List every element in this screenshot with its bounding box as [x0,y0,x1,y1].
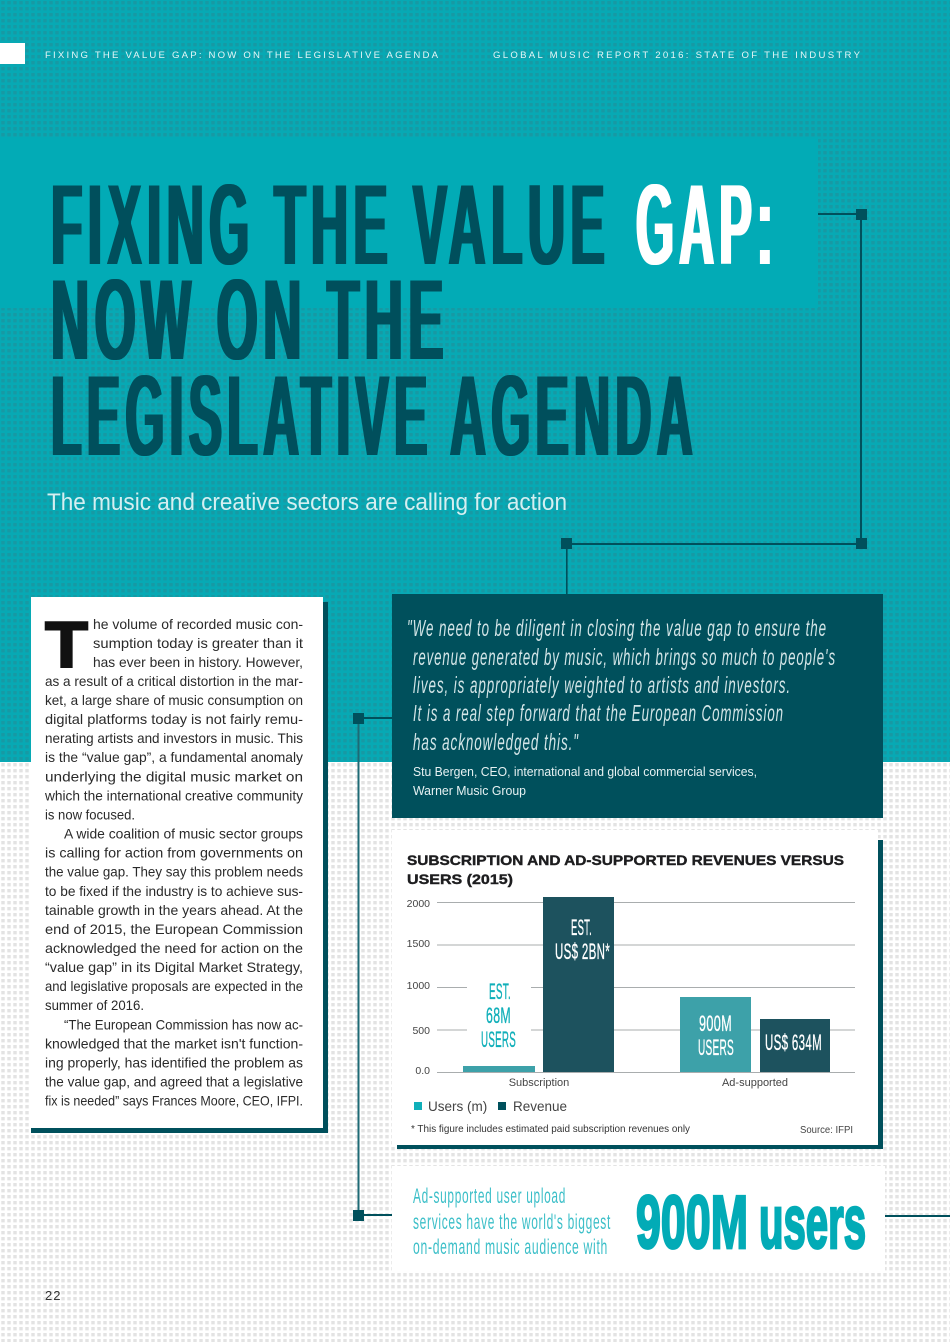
paragraph 3: the value gap, and agreed that a legislative [45,1074,303,1089]
label mask [467,980,531,1035]
paragraph 2: summer of 2016. [45,998,144,1013]
paragraph 2: “value gap” in its Digital Market Strategy, [45,960,303,975]
y axis labels: 1500 [407,938,430,950]
quote text: has acknowledged this." [413,729,579,755]
callout figure: 900M [636,1180,748,1264]
running header right: GLOBAL MUSIC REPORT 2016: STATE OF THE INDUSTRY [493,50,861,61]
paragraph 1: digital platforms today is not fairly remu- [45,712,303,727]
panel: chart background [392,830,878,1145]
connector: top right bracket [561,209,867,595]
x axis labels: Subscription [509,1077,569,1089]
connector: right stub [884,1215,950,1217]
paragraph 1: ket, a large share of music consumption on [45,693,303,708]
chart title: USERS (2015) [407,871,513,887]
paragraph 3: ing properly, has identified the problem as [45,1055,303,1070]
legend: Revenue [513,1099,567,1114]
y axis labels: 2000 [407,898,430,910]
title backing panel [0,137,818,308]
paragraph 1: sumption today is greater than it [93,636,303,651]
bar labels: US$ 634M [765,1030,822,1055]
paragraph 1: nerating artists and investors in music. This [45,731,303,746]
quote text [407,615,836,755]
paragraph 2: A wide coalition of music sector groups [64,827,303,842]
paragraph 2: end of 2015, the European Commission [45,922,303,937]
legend [414,1099,567,1114]
paragraph 3: “The European Commission has now ac- [64,1017,303,1032]
bar chart [407,897,855,1089]
paragraph 2: the value gap. They say this problem needs [45,865,303,880]
panel: quote [392,594,883,818]
callout text: Ad-supported user upload [413,1185,566,1208]
connector: left bracket [353,713,392,1221]
paragraph 2: tainable growth in the years ahead. At the [45,903,303,918]
y axis labels: 500 [412,1025,430,1037]
page tab [0,43,25,64]
x axis labels [509,1077,788,1089]
chart title: SUBSCRIPTION AND AD-SUPPORTED REVENUES VERSUS [407,852,844,868]
paragraph 2: acknowledged the need for action on the [45,941,303,956]
attribution: Stu Bergen, CEO, international and global commercial services, [413,764,757,779]
source: Source: IFPI [800,1124,853,1136]
title [51,159,778,481]
running header left: FIXING THE VALUE GAP: NOW ON THE LEGISLATIVE AGENDA [45,50,439,61]
title: NOW ON THE [51,254,449,385]
paragraph 2: is calling for action from governments on [45,846,303,861]
bar labels: USERS [481,1027,516,1052]
subtitle: The music and creative sectors are calling for action [47,489,567,516]
paragraph 2: and legislative proposals are expected in the [45,979,303,994]
background: teal dotted upper area [0,0,950,762]
paragraph 3: knowledged that the market isn't function- [45,1036,303,1051]
callout text [413,1185,611,1259]
y axis labels [407,898,430,1077]
drop cap: T [45,608,88,681]
bar labels: 900M [699,1011,732,1036]
paragraph 1 [44,617,303,822]
callout text: on-demand music audience with [413,1236,608,1259]
paragraph 1: underlying the digital music market on [45,770,303,784]
bars [463,1066,535,1072]
attribution: Warner Music Group [413,783,526,798]
paragraph 1: is the “value gap”, a fundamental anomaly [45,750,303,765]
panel: body text [31,597,323,1128]
grid lines [437,902,855,1073]
chart panel border [397,840,883,1149]
x axis labels: Ad-supported [722,1077,788,1089]
bar labels: USERS [698,1035,734,1060]
footnote: * This figure includes estimated paid subscription revenues only [411,1123,691,1135]
paragraph 1: has ever been in history. However, [93,655,303,670]
panel: body text shadow [31,602,328,1133]
page number: 22 [45,1288,61,1303]
paragraph 3: fix is needed” says Frances Moore, CEO, IFPI. [45,1094,303,1108]
paragraph 1: is now focused. [45,808,135,822]
chart title [407,852,844,887]
paragraph 2: to be fixed if the industry is to achieve sus- [45,884,303,899]
attribution [413,764,757,798]
bar labels: 68M [486,1003,511,1028]
bar labels: EST. [489,979,511,1004]
y axis labels: 1000 [407,980,430,992]
legend: Users (m) [428,1099,487,1114]
panel: callout [392,1166,885,1273]
bar labels: US$ 2BN* [555,939,610,964]
bar labels [481,915,822,1060]
callout text: services have the world's biggest [413,1211,611,1234]
paragraph 1: he volume of recorded music con- [93,617,303,632]
paragraph 2 [45,827,303,1013]
bar labels: EST. [571,915,592,940]
background: white dotted lower area [0,762,950,1342]
paragraph 3 [45,1017,303,1108]
paragraph 1: which the international creative community [44,788,303,804]
y axis labels: 0.0 [415,1065,430,1077]
paragraph 1: as a result of a critical distortion in the mar- [45,674,303,689]
